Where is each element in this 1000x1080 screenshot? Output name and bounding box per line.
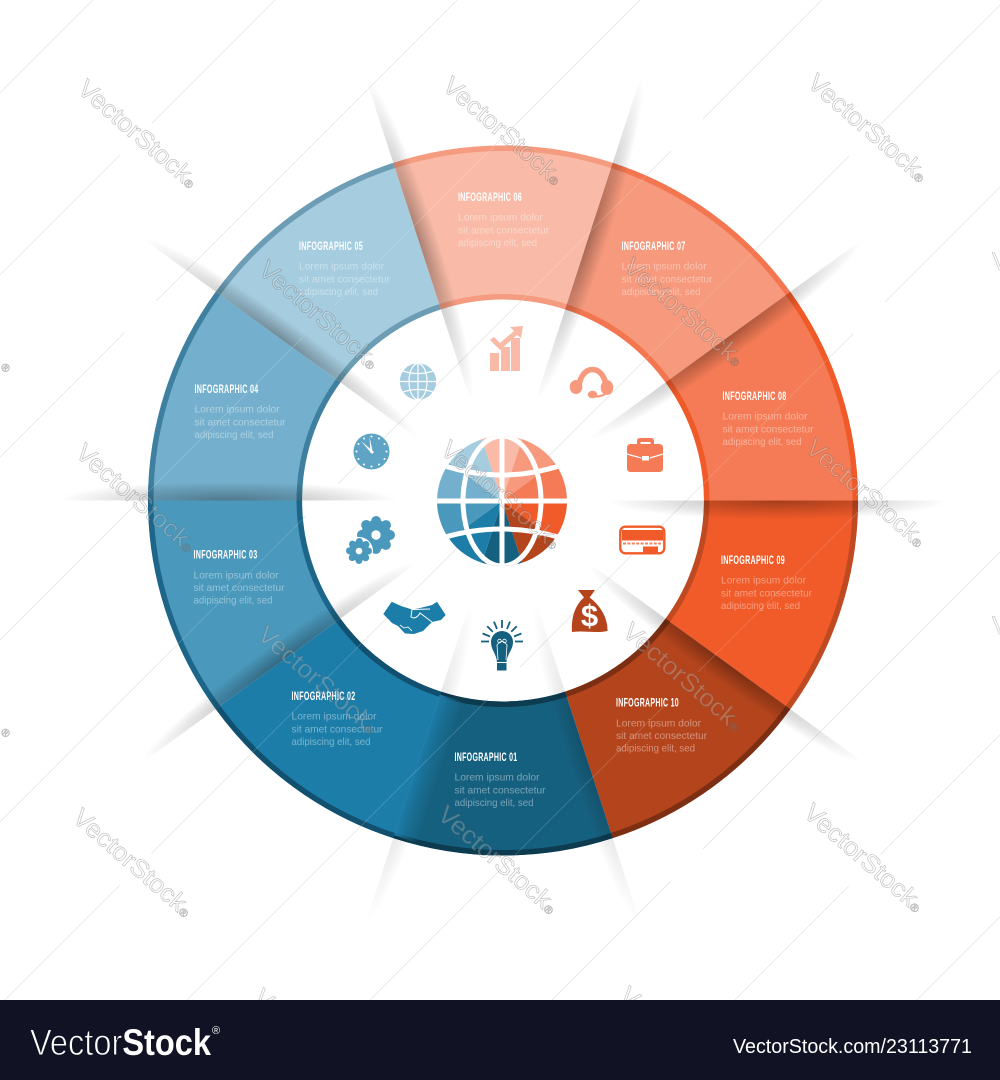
icon: light bulb: [481, 620, 523, 670]
watermarks: VectorStock®: [435, 435, 567, 555]
text block: infographic 09: Lorem ipsum dolor: [721, 575, 806, 587]
text block: infographic 06: sit amet consectetur: [458, 224, 549, 236]
icon: briefcase: [627, 438, 663, 472]
text block: infographic 03: [194, 548, 285, 607]
text block: infographic 04: adipiscing elit, sed: [194, 429, 274, 441]
text block: infographic 03: INFOGRAPHIC 03: [194, 548, 258, 562]
text block: infographic 05: sit amet consectetur: [299, 273, 390, 285]
text block: infographic 07: adipiscing elit, sed: [622, 286, 701, 298]
watermarks: VectorStock®: [798, 798, 930, 918]
icon: growth chart: [490, 326, 523, 371]
text block: infographic 01: sit amet consectetur: [454, 784, 546, 796]
watermarks: VectorStock®: [432, 800, 564, 920]
text block: infographic 09: INFOGRAPHIC 09: [721, 553, 785, 567]
segment 05: [216, 123, 494, 405]
watermarks: VectorStock®: [253, 255, 385, 375]
text block: infographic 08: sit amet consectetur: [722, 423, 814, 435]
segment 07: [553, 163, 811, 410]
text block: infographic 08: Lorem ipsum dolor: [722, 411, 808, 423]
icon: clock: [354, 434, 390, 470]
ring of ten coloured segments: [93, 98, 913, 903]
watermarks: VectorStock®: [618, 252, 750, 372]
watermarks: Ve: [614, 981, 654, 1022]
text block: infographic 10: INFOGRAPHIC 10: [616, 696, 679, 710]
icon: headset: [570, 370, 613, 398]
text block: infographic 09: [721, 553, 812, 612]
text block: infographic 02: INFOGRAPHIC 02: [292, 689, 356, 703]
central globe: [437, 436, 567, 566]
text block: infographic 10: adipiscing elit, sed: [616, 743, 695, 755]
watermarks: Ve: [248, 983, 288, 1024]
text block: infographic 07: [622, 239, 713, 298]
text block: infographic 09: sit amet consectetur: [721, 587, 812, 599]
segment 02: [195, 591, 453, 838]
footer registered mark: ®: [212, 1025, 220, 1037]
text block: infographic 10: sit amet consectetur: [616, 730, 707, 742]
text block: infographic 10: [616, 696, 707, 755]
watermarks: VectorStock®: [252, 620, 384, 740]
watermarks: VectorStock®: [437, 71, 569, 191]
icon: money bag: $: [581, 598, 598, 633]
text block: infographic 02: adipiscing elit, sed: [292, 736, 371, 748]
text block: infographic 07: sit amet consectetur: [622, 273, 713, 285]
watermarks: VectorStock®: [802, 68, 934, 188]
text block: infographic 05: INFOGRAPHIC 05: [299, 239, 363, 253]
footer image id: VectorStock.com/23113771: [733, 1036, 972, 1058]
text block: infographic 03: Lorem ipsum dolor: [194, 569, 279, 581]
text block: infographic 08: [722, 389, 814, 448]
watermarks: VectorStock®: [800, 433, 932, 553]
segment 01: [355, 655, 613, 903]
fold shadows radiating along segment boundaries: [58, 71, 948, 930]
text block: infographic 06: adipiscing elit, sed: [458, 237, 537, 249]
segment 03: [93, 427, 371, 709]
text block: infographic 06: [458, 190, 549, 249]
segment 08: [635, 292, 913, 574]
text block: infographic 03: adipiscing elit, sed: [194, 595, 273, 607]
watermarks: VectorStock®: [70, 438, 202, 558]
text block: infographic 03: sit amet consectetur: [194, 582, 285, 594]
segment 09: [666, 500, 858, 709]
footer bar: [0, 1000, 1000, 1080]
text block: infographic 01: INFOGRAPHIC 01: [454, 750, 518, 764]
text block: infographic 01: adipiscing elit, sed: [454, 797, 534, 809]
segment 04: [148, 292, 340, 500]
text block: infographic 02: Lorem ipsum dolor: [292, 711, 377, 723]
watermarks: VectorStock®: [72, 74, 204, 194]
text block: infographic 06: Lorem ipsum dolor: [458, 212, 543, 224]
icon: credit card: [620, 527, 664, 554]
text block: infographic 01: [454, 750, 546, 809]
text block: infographic 08: INFOGRAPHIC 08: [722, 389, 786, 403]
icon: money bag: [572, 590, 608, 633]
text block: infographic 04: Lorem ipsum dolor: [194, 404, 280, 416]
footer logo: VectorStock: [30, 1022, 211, 1063]
text block: infographic 05: Lorem ipsum dolor: [299, 261, 384, 273]
icon: handshake: [383, 602, 446, 634]
text block: infographic 09: adipiscing elit, sed: [721, 600, 800, 612]
text block: infographic 01: Lorem ipsum dolor: [454, 772, 540, 784]
text block: infographic 02: sit amet consectetur: [292, 723, 383, 735]
text block: infographic 07: Lorem ipsum dolor: [622, 261, 707, 273]
icon: gears: [345, 520, 391, 565]
text block: infographic 07: INFOGRAPHIC 07: [622, 239, 686, 253]
segment 06: [393, 98, 651, 346]
icon: small globe: [400, 363, 436, 400]
text block: infographic 06: INFOGRAPHIC 06: [458, 190, 522, 204]
text block: infographic 04: INFOGRAPHIC 04: [194, 382, 258, 396]
text block: infographic 02: [292, 689, 383, 748]
text block: infographic 10: Lorem ipsum dolor: [616, 717, 701, 729]
text block: infographic 04: sit amet consectetur: [194, 416, 286, 428]
segment 10: [512, 596, 790, 878]
text block: infographic 05: [299, 239, 390, 298]
watermarks: VectorStock®: [67, 803, 199, 923]
watermarks: VectorStock®: [617, 617, 749, 737]
text block: infographic 08: adipiscing elit, sed: [722, 436, 802, 448]
text block: infographic 05: adipiscing elit, sed: [299, 286, 378, 298]
text block: infographic 04: [194, 382, 286, 441]
